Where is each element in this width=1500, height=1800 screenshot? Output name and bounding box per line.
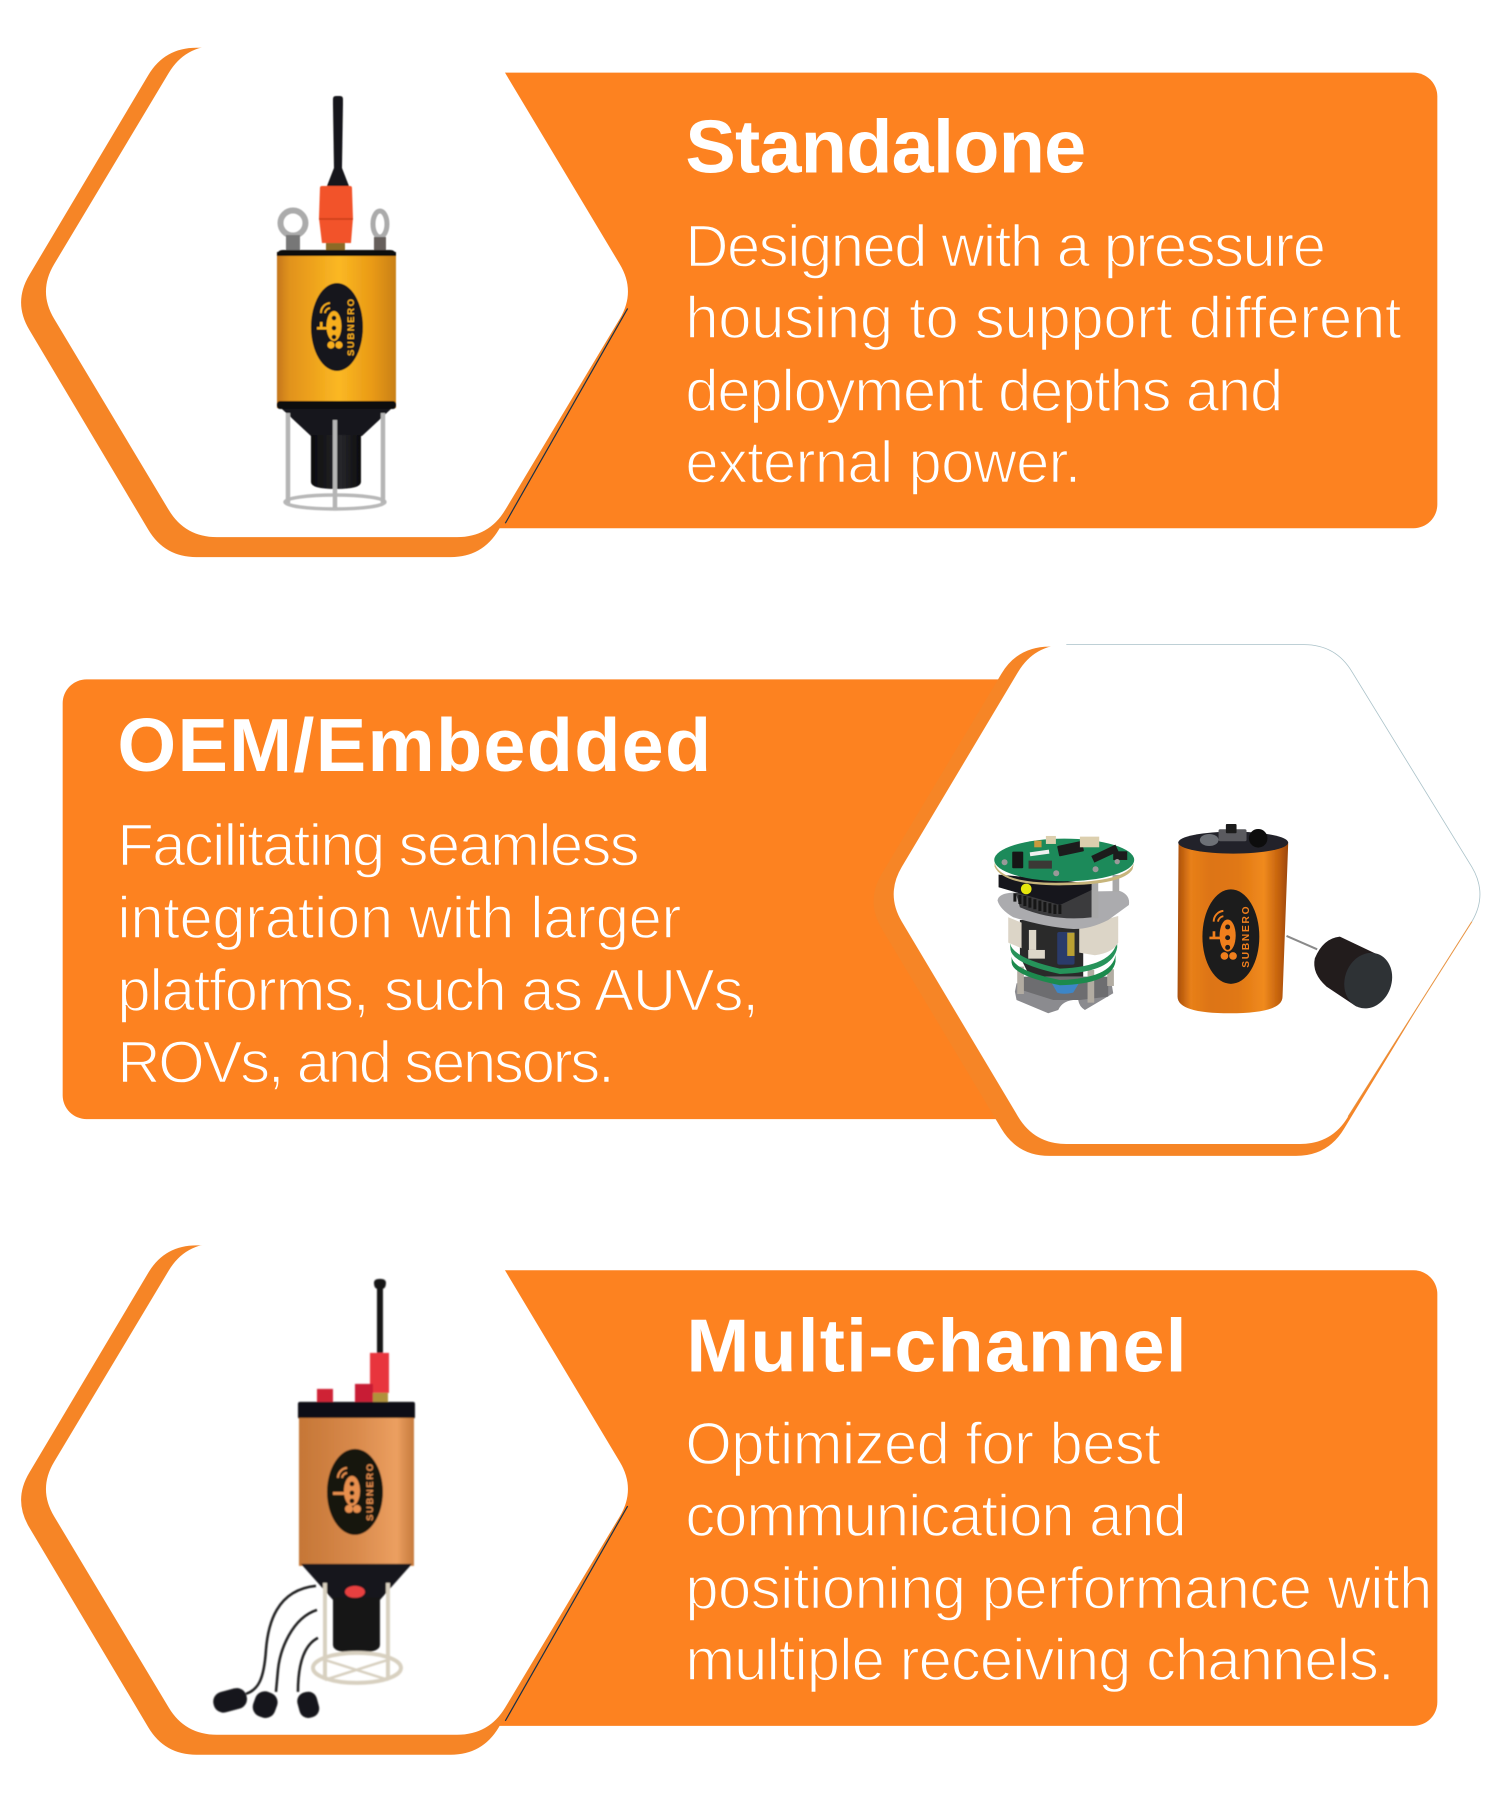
hexagon shadow: OEM: [874, 647, 1474, 1156]
transducer: [333, 1598, 380, 1653]
hexagon lower edge: [1348, 922, 1472, 1117]
antenna: [374, 1279, 386, 1353]
brand text: SUBNERO: [346, 297, 357, 356]
cone: [282, 409, 391, 436]
hexagon: multi-channel: [46, 1243, 628, 1735]
logo: [327, 1449, 383, 1535]
upper board: [1010, 941, 1117, 974]
device: hydrophone: [1287, 936, 1400, 1015]
dark interior: [1020, 920, 1083, 977]
hexagon outline: [1066, 645, 1480, 922]
transducer: [311, 435, 361, 489]
connector cap: [319, 186, 353, 243]
end face: [1337, 946, 1400, 1015]
panel: standalone: [21, 46, 1437, 557]
metal plate: [998, 891, 1129, 929]
lifting eye right: [373, 211, 387, 251]
description: standalone: [685, 213, 1402, 495]
base plate: [1015, 983, 1113, 1013]
blue component: [1051, 982, 1080, 994]
brand text: SUBNERO: [1241, 905, 1252, 968]
red stubs: [317, 1384, 373, 1402]
card background: multi-channel: [448, 1270, 1437, 1726]
cage: [285, 413, 385, 509]
description: multi-channel: communication and: [685, 1482, 1187, 1549]
plate interior: [1016, 882, 1093, 918]
hexagon: OEM: [894, 645, 1480, 1144]
description: OEM: integration with larger: [117, 884, 681, 951]
device: standalone modem: [277, 96, 396, 509]
description: standalone: deployment depths and: [685, 357, 1283, 424]
lifting eye left: [280, 211, 305, 251]
edge line: [505, 1506, 628, 1721]
standoffs: [1021, 967, 1111, 1003]
description: OEM: Facilitating seamless: [117, 811, 640, 878]
description: multi-channel: multiple receiving channels.: [685, 1626, 1395, 1693]
wire: [1287, 936, 1317, 949]
device: circuit stack: [994, 836, 1134, 1013]
description: multi-channel: Optimized for best: [685, 1410, 1161, 1477]
description: OEM: [117, 811, 759, 1095]
top cap: [1178, 832, 1288, 854]
top band: [277, 250, 396, 256]
housing: [299, 1418, 414, 1566]
brand text: SUBNERO: [365, 1462, 376, 1521]
device: copper housing: [1178, 824, 1288, 1013]
description: OEM: ROVs, and sensors.: [117, 1028, 615, 1095]
heat sink fins: [1015, 893, 1060, 914]
red light: [345, 1586, 365, 1598]
top board: [994, 839, 1134, 881]
hexagon shadow: multi-channel: [21, 1245, 623, 1755]
description: standalone: Designed with a pressure: [685, 213, 1326, 280]
heading: multi-channel: Multi-channel: [686, 1305, 1187, 1389]
card background: standalone: [448, 73, 1437, 528]
heat sink: [999, 875, 1092, 905]
lower board: [1012, 955, 1116, 985]
red connector: [370, 1353, 389, 1393]
logo: [1202, 889, 1259, 984]
cone: [301, 1564, 412, 1600]
cables: [246, 1586, 318, 1694]
cap: [298, 1402, 415, 1419]
hexagon shadow: standalone: [21, 48, 623, 557]
heading: OEM: OEM/Embedded: [117, 704, 711, 788]
capacitor: [1057, 932, 1075, 965]
description: multi-channel: positioning performance with: [685, 1554, 1432, 1621]
connector white: [1029, 930, 1036, 950]
card background: OEM: [63, 679, 1057, 1119]
description: OEM: platforms, such as AUVs,: [117, 957, 759, 1024]
top board edge: [995, 863, 1134, 885]
edge line: [505, 308, 628, 523]
housing: [277, 252, 396, 408]
logo: [311, 283, 363, 371]
heading: standalone: Standalone: [685, 106, 1086, 190]
metal drums: [1008, 916, 1118, 955]
standoff: [1095, 875, 1116, 918]
housing: [1178, 843, 1288, 1013]
hexagon: standalone: [46, 46, 628, 537]
description: standalone: external power.: [685, 428, 1081, 495]
device: multi-channel modem: [211, 1279, 415, 1721]
cage: [313, 1583, 401, 1683]
description: multi-channel: [685, 1410, 1432, 1693]
board parts: [1002, 836, 1127, 876]
yellow dot: [1021, 884, 1032, 894]
antenna: [327, 96, 349, 186]
connectors: [1200, 824, 1268, 848]
brass base: [373, 1393, 388, 1402]
connector base: [326, 243, 345, 252]
transducers: [211, 1686, 321, 1721]
description: standalone: housing to support different: [685, 284, 1402, 351]
body: [1314, 937, 1375, 1007]
lower interior: [1022, 977, 1108, 1000]
panel: OEM/embedded: [63, 645, 1480, 1156]
bottom band: [277, 401, 396, 409]
panel: multi-channel: [21, 1243, 1437, 1755]
